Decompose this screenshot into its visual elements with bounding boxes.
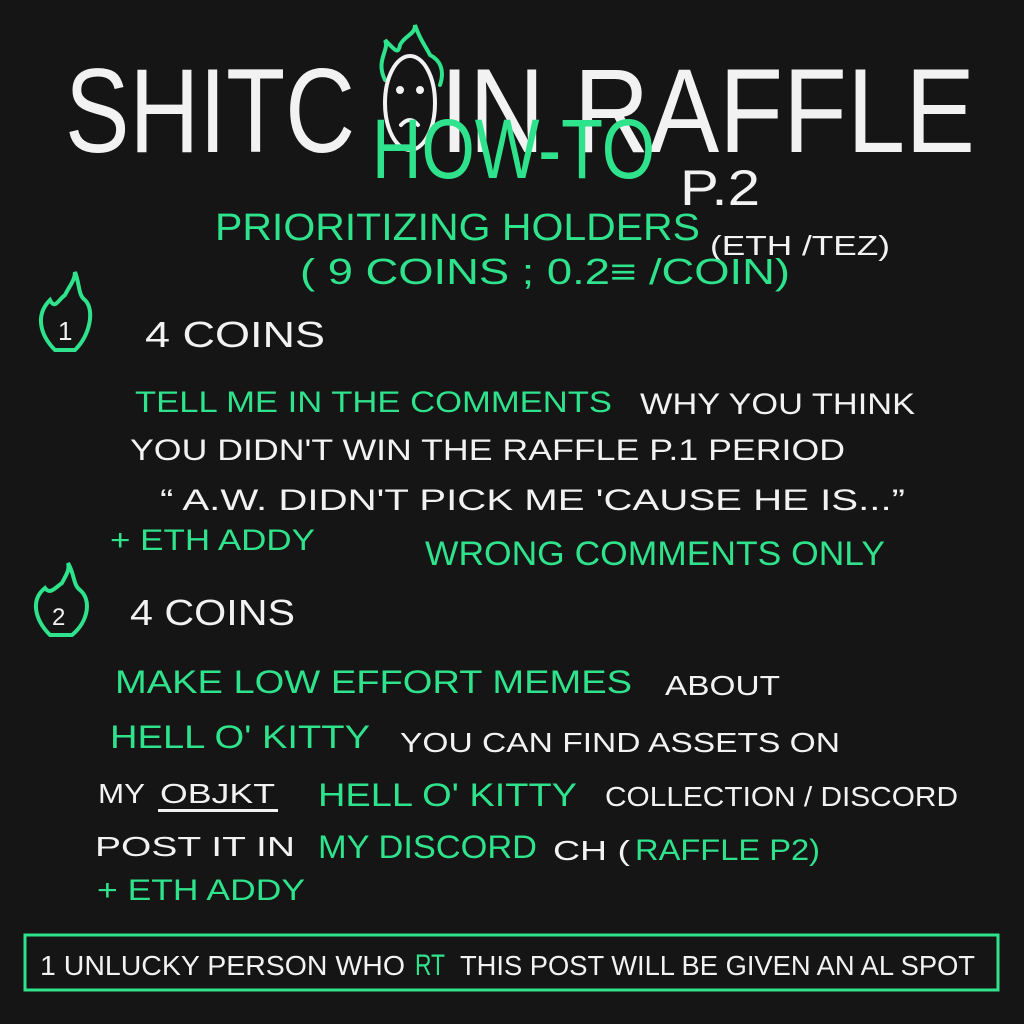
step 2 text: MY DISCORD: [318, 829, 537, 865]
step 2 heading: 4 COINS: [130, 592, 295, 633]
heading: prioritizing holders: (ETH /TEZ): [710, 230, 890, 261]
icon: flaming face: [381, 25, 442, 150]
step 2 text: OBJKT: [160, 778, 275, 809]
step 1 text: [110, 386, 915, 573]
step 2 text: COLLECTION / DISCORD: [605, 781, 958, 812]
icon: flame 1: 1: [58, 316, 72, 346]
step 1 text: TELL ME IN THE COMMENTS: [135, 386, 612, 419]
step 1 text: WRONG COMMENTS ONLY: [425, 535, 885, 573]
subtitle: how-to p.2: P.2: [680, 160, 760, 216]
callout box: 1 UNLUCKY PERSON WHO: [40, 950, 405, 981]
step 2 text: MAKE LOW EFFORT MEMES: [115, 664, 632, 700]
step 1 text: YOU DIDN'T WIN THE RAFFLE P.1 PERIOD: [130, 434, 845, 467]
title: SHITC: [65, 44, 355, 178]
step 2 text: [95, 664, 958, 907]
callout box: RT: [415, 949, 445, 982]
step 2 text: CH (: [553, 835, 631, 866]
step 2 text: MY: [98, 778, 145, 809]
step 1 text: WHY YOU THINK: [640, 388, 915, 421]
icon: flame 2: [36, 563, 87, 635]
step 2 text: RAFFLE P2): [635, 834, 820, 867]
heading: prioritizing holders: ( 9 COINS ; 0.2≡ /COIN): [300, 251, 790, 292]
icon: flame 1: [41, 272, 90, 350]
step 2 text: ABOUT: [665, 670, 780, 701]
heading: prioritizing holders: PRIORITIZING HOLDERS: [215, 207, 700, 249]
step 2 text: POST IT IN: [95, 831, 295, 862]
heading: prioritizing holders: [215, 207, 890, 292]
step 1 heading: 4 COINS: [145, 314, 325, 355]
title: [65, 25, 975, 178]
step 1 text: “ A.W. DIDN'T PICK ME 'CAUSE HE IS...”: [160, 484, 905, 517]
step 2 text: + ETH ADDY: [97, 874, 305, 907]
callout box: THIS POST WILL BE GIVEN AN AL SPOT: [460, 950, 975, 981]
step 2 text: HELL O' KITTY: [318, 777, 577, 813]
step 2 text: HELL O' KITTY: [110, 719, 370, 755]
step 2 text: YOU CAN FIND ASSETS ON: [400, 727, 840, 758]
icon: flame 2: 2: [52, 604, 65, 631]
callout box: [25, 935, 998, 990]
step 1 text: + ETH ADDY: [110, 524, 315, 557]
subtitle: how-to p.2: HOW-TO: [372, 102, 655, 196]
